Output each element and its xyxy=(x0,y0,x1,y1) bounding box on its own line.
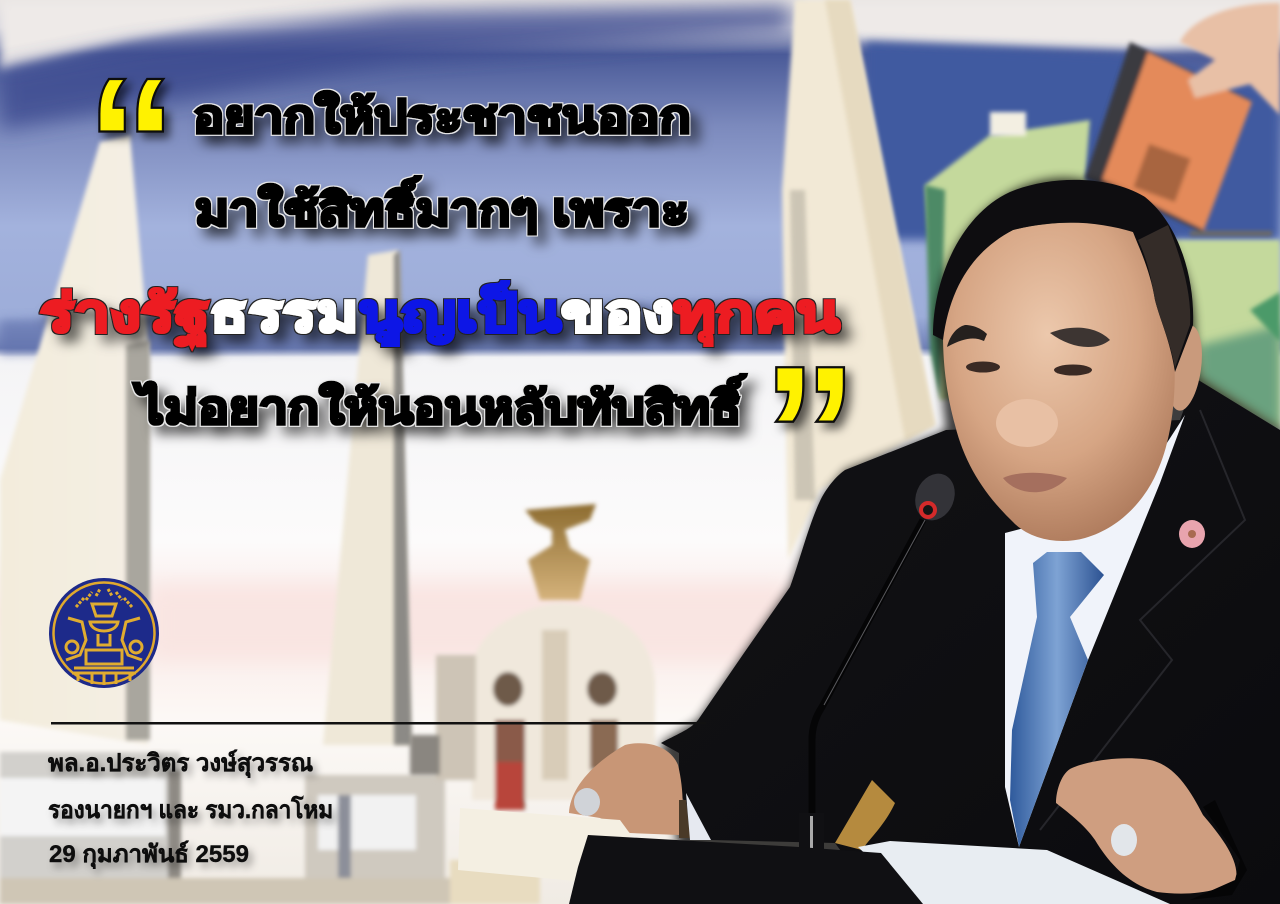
divider line xyxy=(51,722,706,724)
microphone base unit xyxy=(569,835,923,904)
headline quote xyxy=(40,39,858,541)
speaker name: พล.อ.ประวิตร วงษ์สุวรรณ xyxy=(48,749,313,779)
left hand with ring xyxy=(569,743,683,835)
ballot paper and hand xyxy=(1085,3,1280,236)
opening quote mark: “ xyxy=(86,39,177,246)
hair xyxy=(933,180,1193,372)
closing quote mark: ” xyxy=(762,325,858,541)
emblem: government seal xyxy=(49,578,159,688)
green map xyxy=(925,120,1280,430)
line 1: อยากให้ประชาชนออก xyxy=(193,90,691,142)
documents on desk xyxy=(458,808,1170,904)
lower monument base xyxy=(0,752,540,904)
mouth xyxy=(1003,473,1067,492)
left cuff xyxy=(679,800,690,838)
line 3: ร่างรัฐธรรมนูญเป็นของทุกคน xyxy=(40,282,840,347)
table patch behind arm xyxy=(835,780,895,850)
face xyxy=(943,223,1175,541)
watch and right sleeve xyxy=(1190,800,1247,900)
person: portrait figure xyxy=(569,180,1280,904)
microphone xyxy=(799,468,962,871)
suit jacket xyxy=(661,378,1280,904)
person: dark blurred outline xyxy=(661,178,1280,860)
caption: speaker name, title and date xyxy=(48,749,333,870)
lapel pin xyxy=(1179,520,1205,548)
line 2: มาใช้สิทธิ์มากๆ เพราะ xyxy=(195,177,689,235)
shirt xyxy=(1005,415,1185,847)
ear xyxy=(1163,323,1207,413)
speaker title: รองนายกฯ และ รมว.กลาโหม xyxy=(48,795,333,823)
central monument xyxy=(410,504,655,810)
blue tie xyxy=(1010,552,1104,847)
right wing of monument xyxy=(782,0,935,560)
right hand with ring xyxy=(1056,758,1237,894)
left wing of monument xyxy=(0,135,148,745)
eyebrows xyxy=(947,325,987,347)
line 4: ไม่อยากให้นอนหลับทับสิทธิ์ xyxy=(133,375,746,433)
middle wing of monument xyxy=(323,250,411,745)
nose xyxy=(996,399,1058,447)
eyes xyxy=(966,362,1000,372)
date: 29 กุมภาพันธ์ 2559 xyxy=(49,840,249,870)
jacket lapel edge xyxy=(1040,410,1245,830)
